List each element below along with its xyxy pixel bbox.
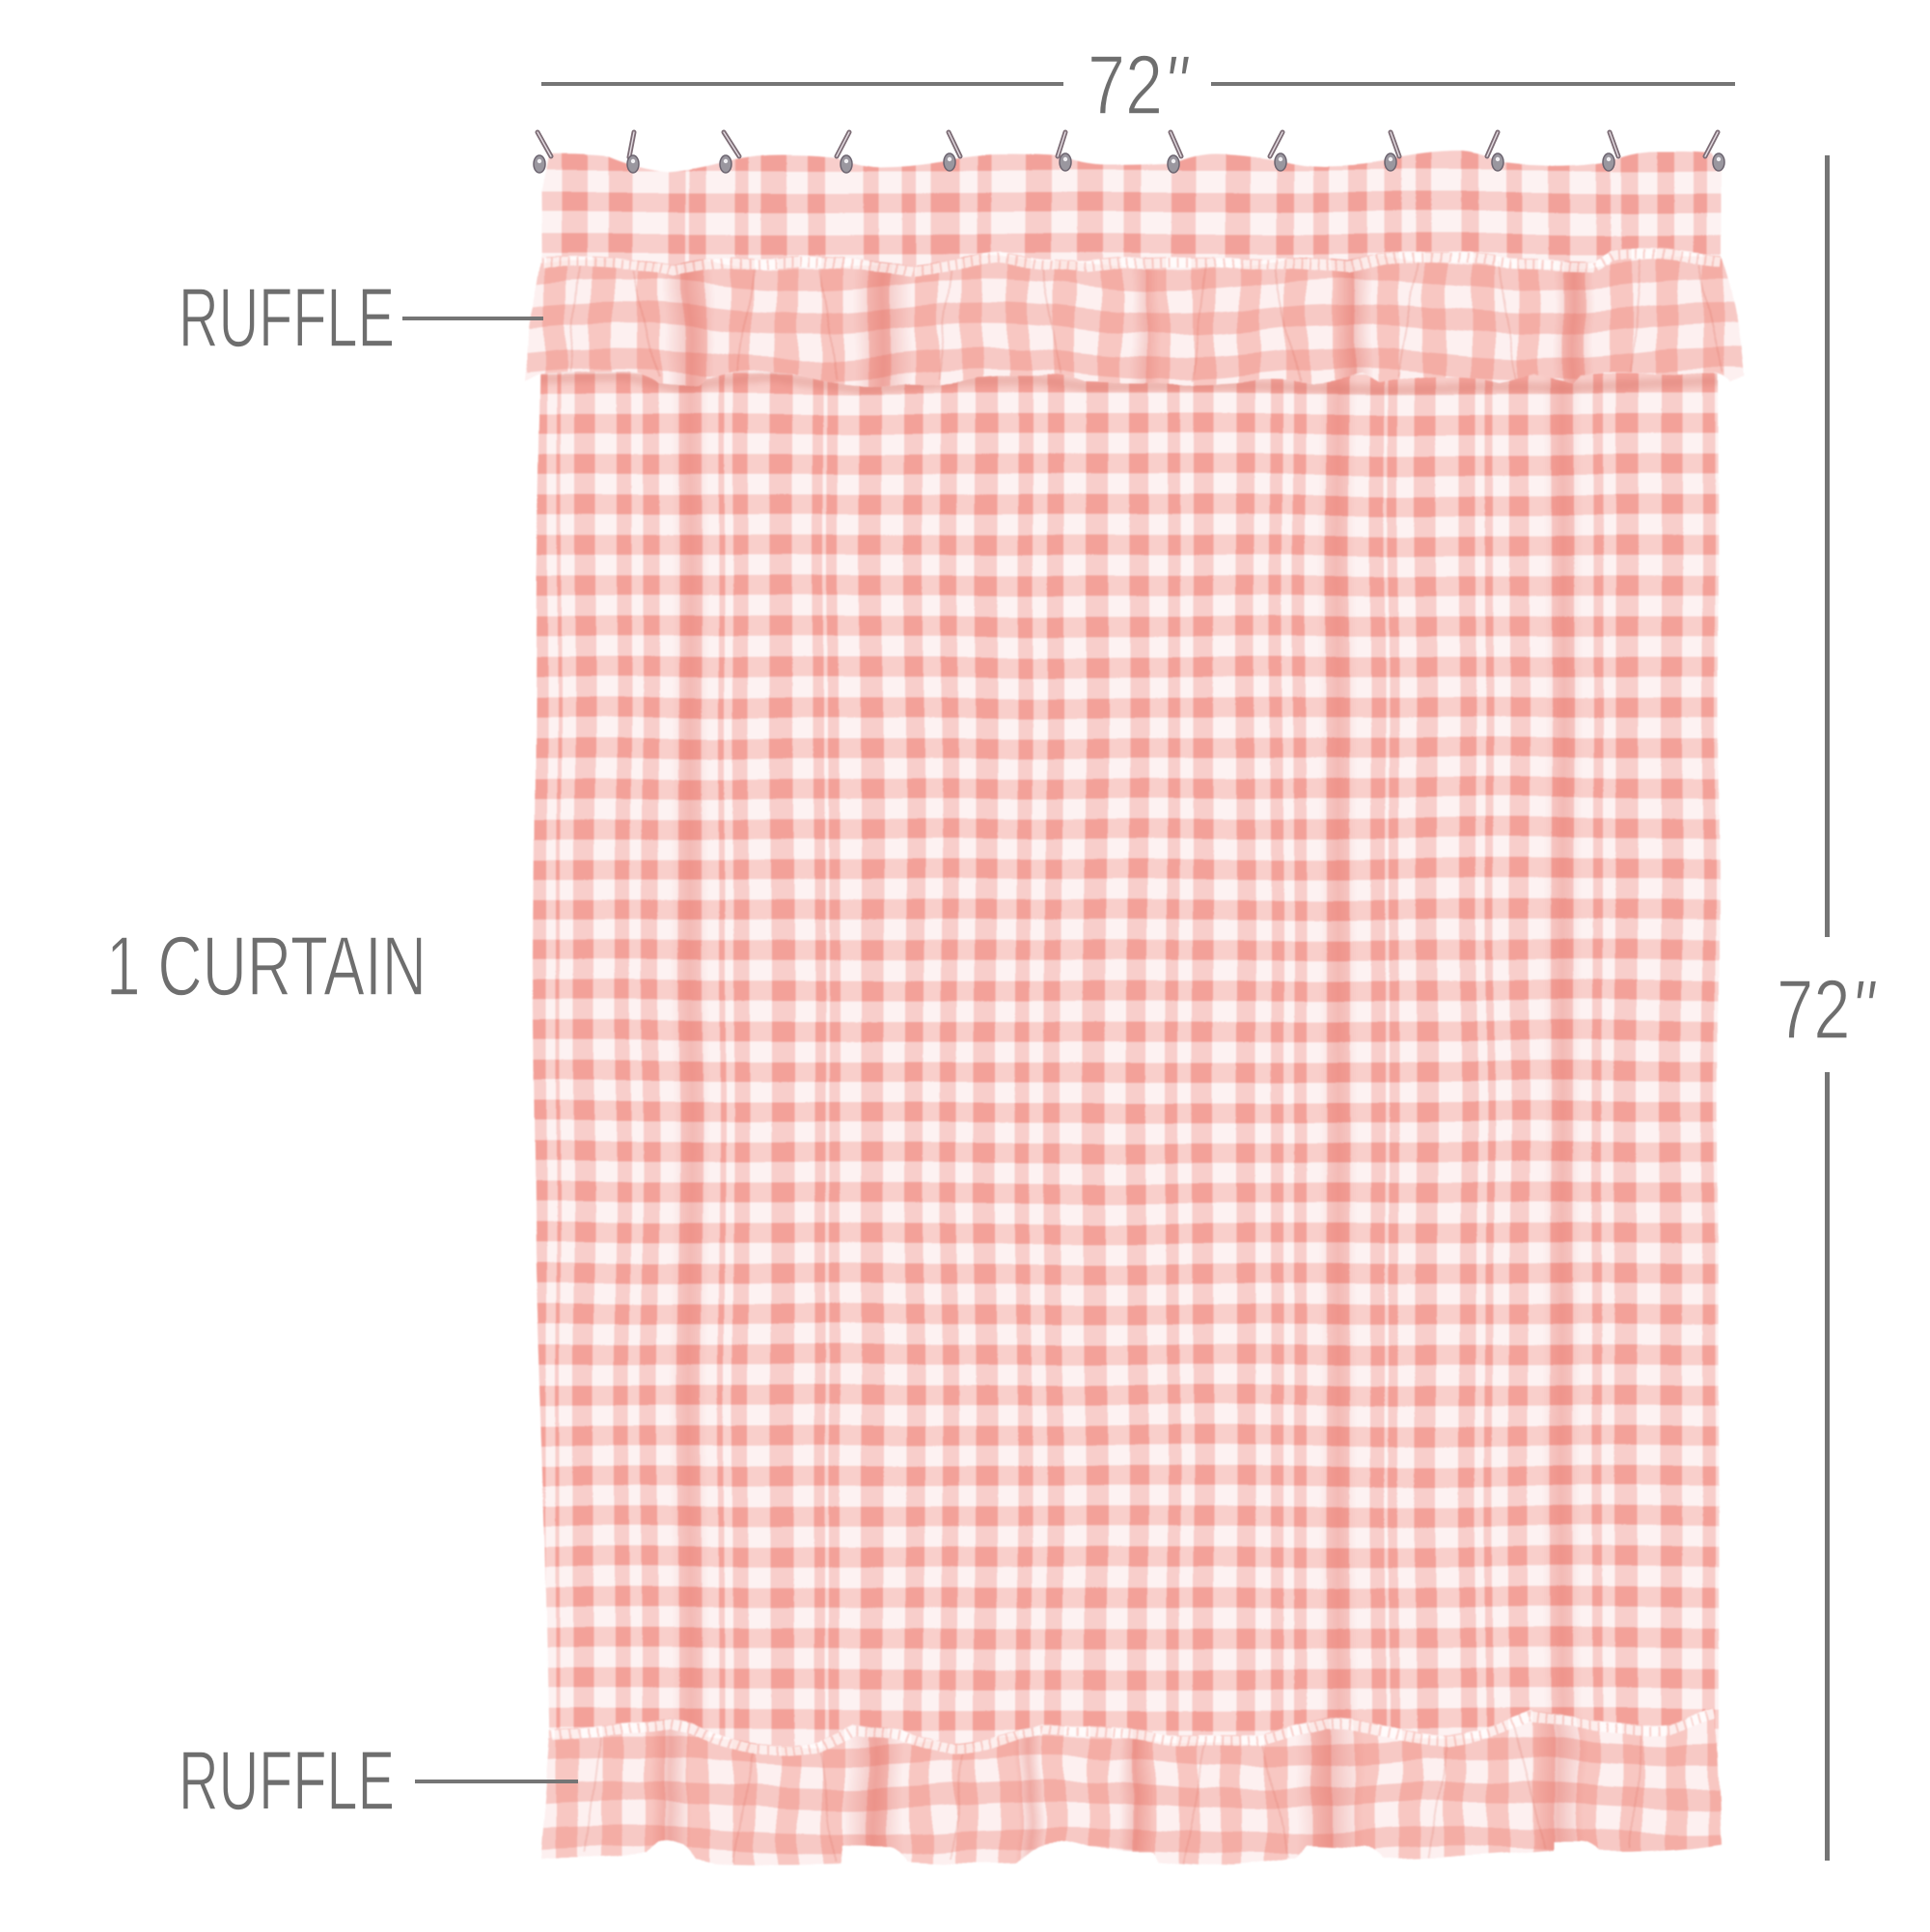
curtain illustration [521,132,1809,1867]
width dimension: 72 inches: 72" [1088,39,1190,132]
height dimension: 72 inches [1777,155,1877,1861]
bottom ruffle [521,1708,1795,1867]
callout: top ruffle: RUFFLE [179,271,395,365]
height dimension: 72 inches: 72" [1777,963,1877,1057]
curtain body gingham [526,367,1727,1747]
callout: 1 curtain: 1 CURTAIN [106,920,427,1013]
curtain header band [537,151,1723,280]
callout: bottom ruffle: RUFFLE [179,1734,395,1828]
top ruffle [526,249,1809,386]
width dimension: 72 inches [541,39,1735,132]
curtain hooks [534,132,1724,173]
